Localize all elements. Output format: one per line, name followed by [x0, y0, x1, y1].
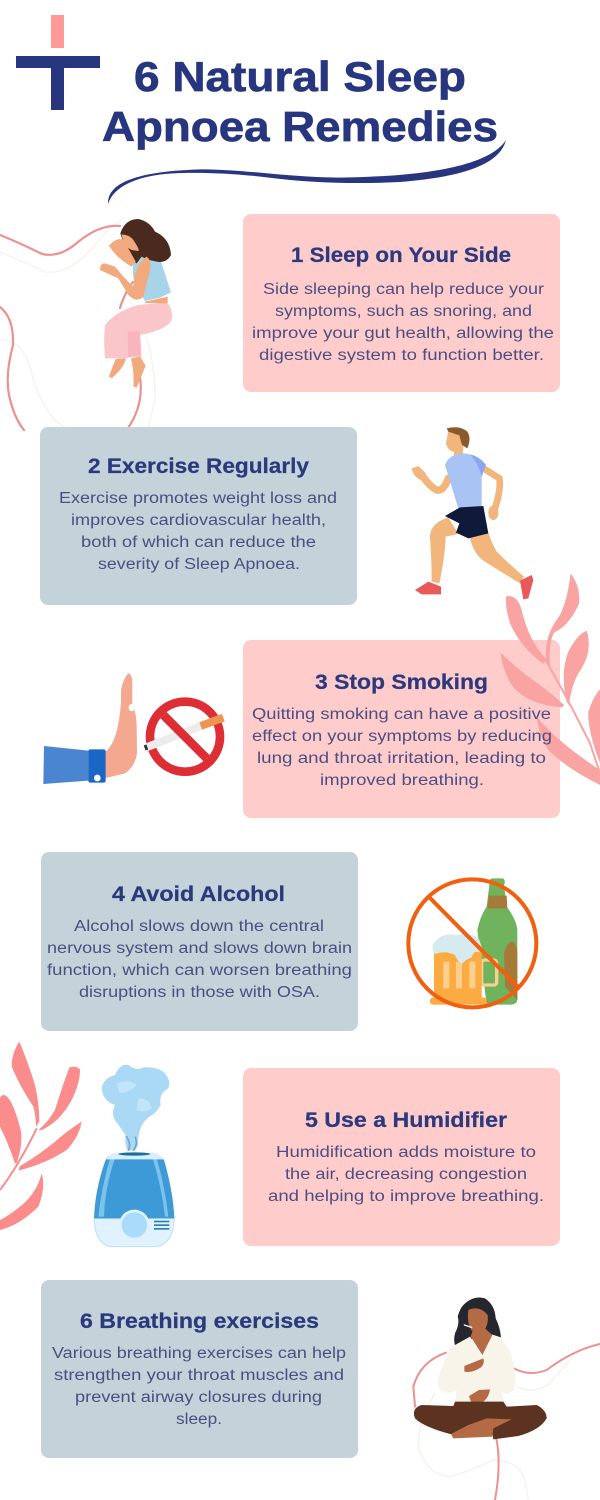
- body text: [252, 281, 554, 364]
- body text: improves cardiovascular health,: [71, 512, 326, 529]
- body text: Humidification adds moisture to: [276, 1144, 536, 1161]
- body text: [52, 1345, 346, 1428]
- title: [102, 53, 498, 150]
- body text: effect on your symptoms by reducing: [252, 728, 552, 745]
- illustration: man running: [412, 427, 533, 599]
- panel: 6 breathing exercises: [41, 1280, 358, 1458]
- icon: hand refusing cigarette: [43, 673, 223, 784]
- panel: 3 stop smoking background: [243, 640, 560, 818]
- body text: Side sleeping can help reduce your: [263, 281, 544, 298]
- decorative curves bottom right: [413, 1344, 600, 1500]
- body text: lung and throat irritation, leading to: [257, 750, 546, 767]
- decorative leaf branch right: [501, 573, 600, 785]
- body text: [268, 1144, 544, 1205]
- panel: 4 avoid alcohol: [41, 852, 358, 1031]
- body text: improved breathing.: [320, 772, 484, 789]
- icon: no alcohol: [408, 878, 536, 1007]
- heading: 5 Use a Humidifier: [305, 1109, 507, 1132]
- decorative curves top left: [0, 218, 155, 430]
- body text: Exercise promotes weight loss and: [59, 490, 337, 507]
- heading: 6 Breathing exercises: [80, 1310, 319, 1333]
- body text: function, which can worsen breathing: [47, 962, 352, 979]
- body text: Alcohol slows down the central: [74, 918, 324, 935]
- heading: 2 Exercise Regularly: [88, 455, 309, 478]
- panel: 1 sleep on your side: [243, 214, 560, 392]
- heading: 1 Sleep on Your Side: [291, 244, 511, 267]
- body text: nervous system and slows down brain: [47, 940, 352, 957]
- icon: medical cross logo: [16, 15, 100, 110]
- body text: [252, 706, 552, 789]
- body text: [59, 490, 337, 573]
- body text: disruptions in those with OSA.: [79, 984, 320, 1001]
- heading: 3 Stop Smoking: [315, 671, 488, 694]
- body text: Quitting smoking can have a positive: [252, 706, 551, 723]
- panel: 2 exercise regularly: [40, 427, 357, 605]
- title: Apnoea Remedies: [102, 103, 498, 150]
- illustration: woman sleeping on her side: [100, 219, 172, 388]
- body text: and helping to improve breathing.: [268, 1188, 544, 1205]
- text block: 3 stop smoking: [252, 671, 552, 789]
- heading: 4 Avoid Alcohol: [112, 883, 285, 906]
- body text: Various breathing exercises can help: [52, 1345, 346, 1362]
- body text: [47, 918, 352, 1001]
- decorative leaf branch left: [0, 1042, 82, 1230]
- body text: the air, decreasing congestion: [285, 1166, 527, 1183]
- body text: prevent airway closures during: [75, 1389, 322, 1406]
- body text: both of which can reduce the: [81, 534, 316, 551]
- body text: sleep.: [176, 1411, 222, 1428]
- illustration: humidifier: [94, 1065, 174, 1247]
- illustration: woman breathing cross-legged: [414, 1297, 547, 1439]
- title underline swoosh: [108, 140, 506, 204]
- body text: improve your gut health, allowing the: [252, 325, 554, 342]
- body text: severity of Sleep Apnoea.: [98, 556, 300, 573]
- body text: digestive system to function better.: [259, 347, 544, 364]
- body text: symptoms, such as snoring, and: [275, 303, 532, 320]
- body text: strengthen your throat muscles and: [54, 1367, 344, 1384]
- panel: 5 use a humidifier: [243, 1068, 560, 1246]
- title: 6 Natural Sleep: [134, 53, 466, 100]
